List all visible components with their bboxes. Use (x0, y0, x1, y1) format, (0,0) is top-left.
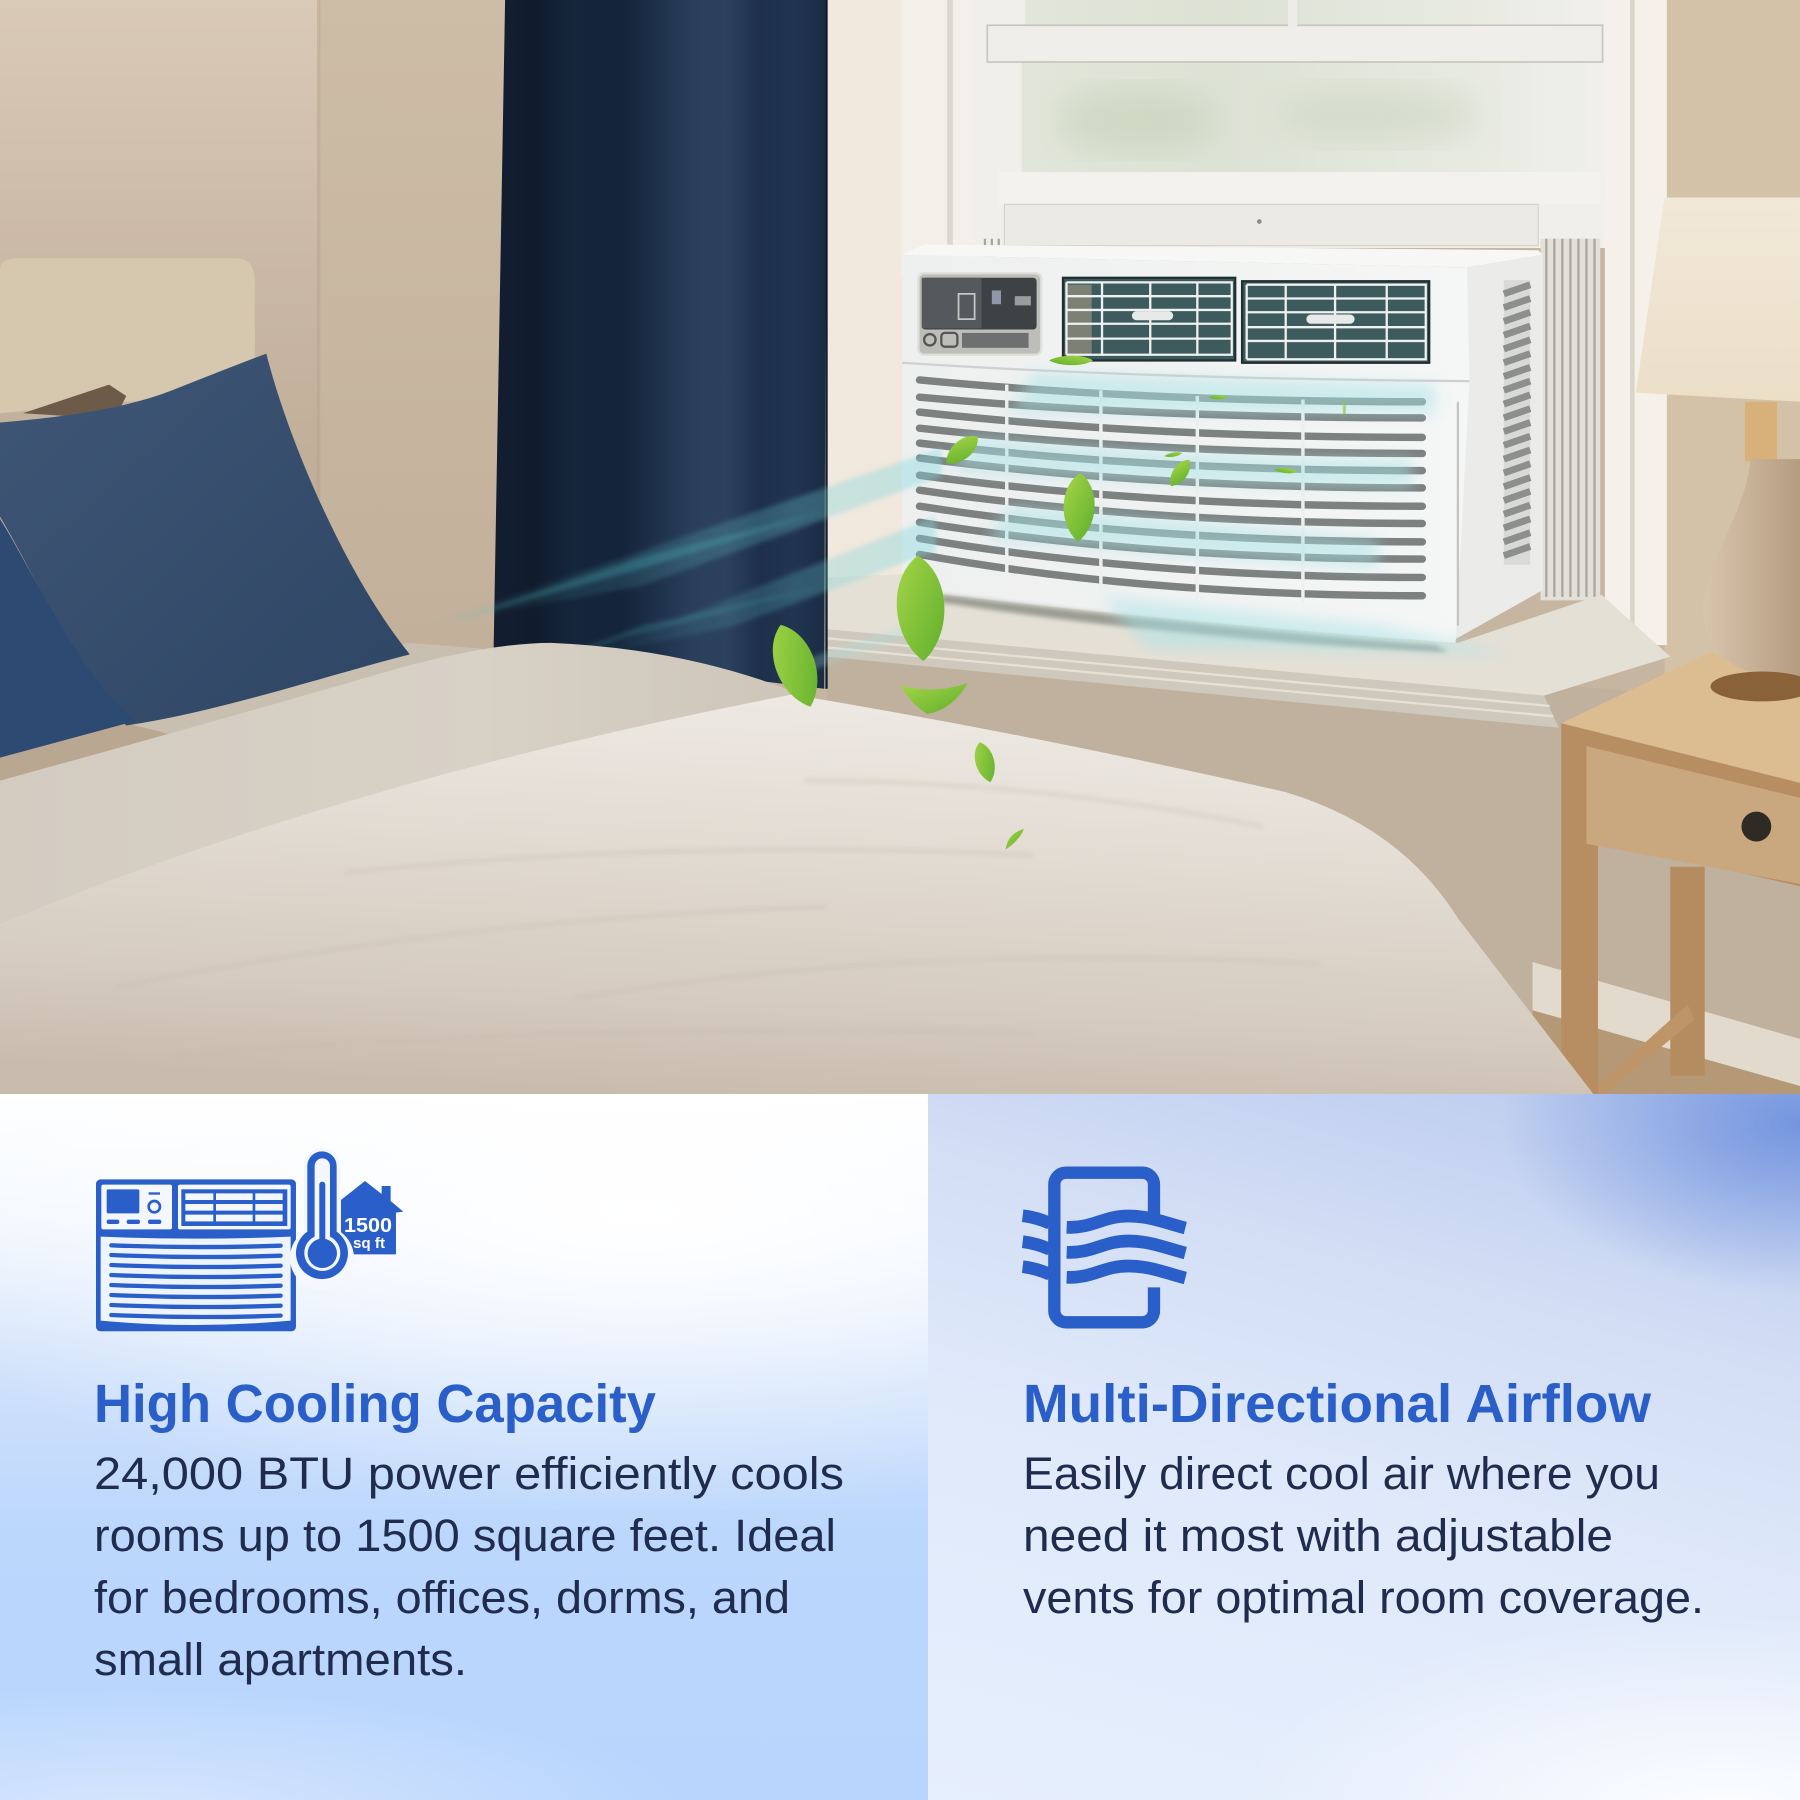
icon: airflow through vent (1023, 1173, 1185, 1322)
window sill (827, 574, 1670, 728)
leaf 10 (1274, 467, 1297, 474)
body text: cooling capacity: for bedrooms, offices, dorms, and (94, 1572, 790, 1623)
accordion side panels (985, 239, 1600, 600)
lamp neck (1745, 402, 1777, 461)
icon: vent frame (1054, 1173, 1154, 1322)
body text: cooling capacity: small apartments. (94, 1634, 467, 1685)
leaf 1 (762, 618, 829, 714)
nightstand (1561, 652, 1800, 1100)
duvet fold (0, 643, 804, 964)
ac front grille (920, 380, 1458, 626)
air conditioner (902, 245, 1543, 652)
leaf 13 (1164, 451, 1183, 458)
duvet wrinkles (115, 781, 1320, 1056)
airflow streaks (425, 448, 941, 686)
ac shadow on the sill (941, 595, 1449, 652)
leaves (762, 356, 1346, 849)
ac control panel (918, 273, 1041, 355)
wall: lit area by the window (827, 0, 907, 643)
window glass with blurred trees (987, 0, 1603, 246)
leaf 8 (1049, 356, 1093, 365)
icon: air conditioner (96, 1179, 296, 1331)
body text: cooling capacity (94, 1448, 844, 1685)
ac top face (902, 245, 1543, 267)
nightstand top (1561, 652, 1800, 783)
headboard (0, 258, 255, 413)
leaf 6 (1062, 472, 1096, 542)
body text: cooling capacity: 24,000 BTU power efficiently cools (94, 1448, 844, 1499)
nightstand drawer (1586, 746, 1800, 884)
pillow: brown (23, 385, 126, 419)
heading: multi-directional airflow: Multi-Directional Airflow (1023, 1374, 1652, 1434)
wall: below the sill (827, 643, 1800, 1094)
wall: left and centre (0, 0, 1800, 1094)
body text: cooling capacity: rooms up to 1500 square feet. Ideal (94, 1510, 836, 1561)
lamp (1636, 197, 1800, 701)
leaf 12 (1343, 399, 1346, 418)
body text: airflow: Easily direct cool air where you (1023, 1448, 1660, 1499)
icon label: 1500: 1500 (344, 1215, 392, 1237)
heading: high cooling capacity: High Cooling Capacity (94, 1374, 656, 1434)
body text: airflow (1023, 1448, 1704, 1623)
lamp base (1704, 459, 1800, 677)
icon: house (341, 1181, 403, 1254)
body text: airflow: need it most with adjustable (1023, 1510, 1613, 1561)
ac upper vents (1063, 278, 1429, 363)
cool air over the unit (953, 373, 1515, 654)
panel: multi-directional airflow (928, 1094, 1800, 1800)
ac side face (1449, 255, 1543, 643)
photo: bedroom with window air conditioner (0, 0, 1800, 1094)
window trim (901, 0, 1667, 645)
lamp foot (1710, 672, 1800, 701)
leaf 4 (971, 740, 999, 785)
leaf 3 (901, 683, 968, 714)
wall: right of window (1665, 0, 1800, 1094)
icon: air conditioner with thermometer and 1500 sq ft house (96, 1151, 403, 1331)
leaf 2 (894, 554, 947, 662)
lamp shade (1636, 197, 1800, 402)
icon label: sq ft: sq ft (353, 1235, 385, 1252)
mattress behind pillows (126, 643, 528, 735)
icon: air waves (1023, 1216, 1185, 1278)
ac divider seam (902, 363, 1469, 381)
body text: airflow: vents for optimal room coverage. (1023, 1572, 1704, 1623)
pillow: navy main (0, 354, 410, 726)
ac front body (902, 255, 1469, 643)
panel: high cooling capacity (0, 1094, 928, 1800)
drawer knob (1741, 812, 1771, 841)
icon: thermometer (293, 1151, 351, 1287)
bed duvet (0, 695, 1593, 1094)
leaf 7 (940, 430, 984, 470)
curtain (494, 0, 827, 689)
nightstand rear leg (1670, 867, 1705, 1076)
nightstand frame (1561, 723, 1800, 1094)
nightstand cross bar (1598, 1004, 1694, 1100)
leaf 9 (1165, 456, 1195, 490)
leaf 5 (1006, 829, 1024, 849)
leaf 11 (1209, 395, 1227, 399)
floor (1533, 1010, 1800, 1094)
baseboard (1533, 962, 1800, 1086)
pillow: navy front (0, 519, 135, 758)
ac side louvers (1504, 280, 1530, 565)
